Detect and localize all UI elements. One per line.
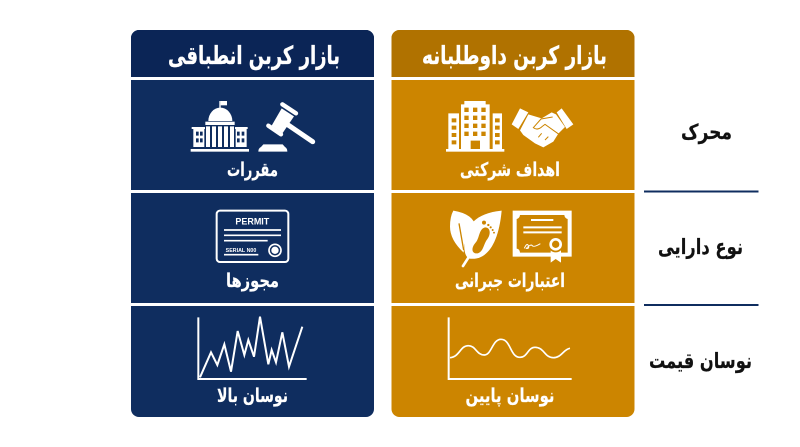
panel: voluntary carbon market (392, 30, 634, 417)
panel: compliance carbon market (131, 30, 374, 417)
icon: leaf with footprint (450, 211, 502, 266)
heading: voluntary market: بازار کربن داوطلبانه (422, 41, 607, 71)
label: low volatility: نوسان پایین (466, 385, 554, 407)
icon: permit (217, 211, 288, 262)
icon: permit: SERIAL N00 (226, 248, 256, 254)
icon: permit: PERMIT (235, 216, 270, 226)
icon: handshake (512, 108, 573, 147)
header band (392, 30, 634, 77)
row label: price volatility: نوسان قیمت (649, 349, 752, 373)
row label: asset type: نوع دارایی (658, 235, 743, 259)
icon: government building (191, 101, 249, 152)
icon: certificate (513, 211, 572, 263)
chart: high volatility (198, 317, 307, 379)
label: offset credits: اعتبارات جبرانی (455, 270, 565, 292)
icon: gavel (258, 104, 313, 152)
label: permits: مجوزها (226, 270, 279, 292)
chart: low volatility (449, 317, 572, 379)
row label: driver: محرک (681, 120, 732, 144)
label: corporate goals: اهداف شرکتی (460, 159, 560, 181)
heading: compliance market: بازار کربن انطباقی (168, 41, 340, 71)
panel background orange (392, 30, 634, 417)
panel background navy (131, 30, 374, 417)
label: high volatility: نوسان بالا (217, 385, 288, 407)
header band (131, 30, 374, 77)
icon: office buildings (446, 101, 504, 152)
label: regulations: مقررات (227, 159, 278, 181)
